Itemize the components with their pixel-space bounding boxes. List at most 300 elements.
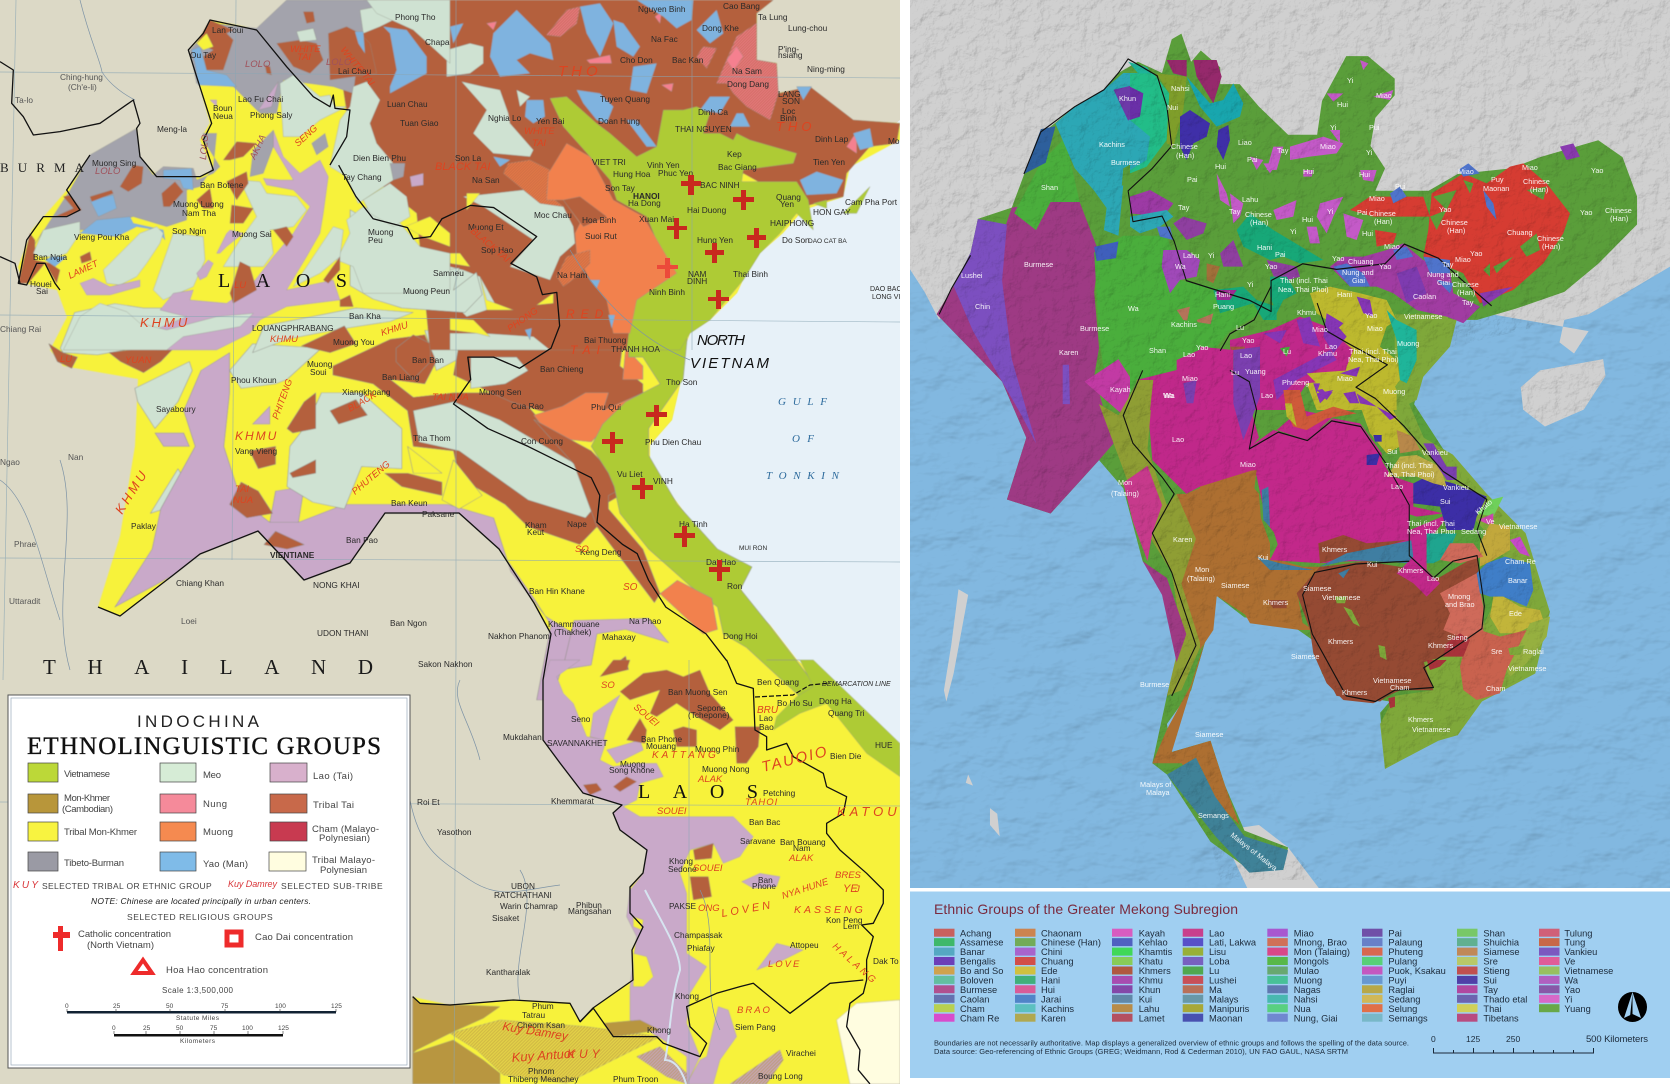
legend key line: tribal group and sub-tribe: KUY: [13, 880, 39, 891]
legend labels: Thai: [1483, 1004, 1501, 1014]
ethnic group labels: NUA: [233, 495, 253, 506]
ethnic group labels: [961, 76, 1632, 873]
ethnic group labels: KATOU: [837, 804, 901, 819]
ethnic group labels: Kayah: [1110, 385, 1131, 394]
legend labels: Cham: [960, 1004, 985, 1014]
place labels: Muong Sen: [479, 387, 522, 397]
ethnic group labels: Banar: [1508, 576, 1528, 585]
legend labels: Jarai: [1041, 994, 1061, 1004]
scale bars: Kilometers: [180, 1038, 216, 1045]
ethnic group labels: Yao: [1196, 343, 1208, 352]
ethnic group labels: Pui: [1395, 182, 1406, 191]
legend labels: Raglai: [1388, 985, 1415, 995]
ethnic group labels: KUY: [567, 1047, 604, 1061]
ethnic group labels: Stieng: [1447, 633, 1468, 642]
legend labels: Shuichia: [1483, 938, 1520, 948]
panel: Greater Mekong legend: [910, 892, 1670, 1078]
ethnic group labels: (Han): [1250, 218, 1268, 227]
place labels: Petching: [763, 788, 796, 798]
place labels: Lem: [843, 921, 859, 931]
place labels: Hung Yen: [697, 235, 733, 245]
place labels: Warin Chamrap: [500, 901, 558, 911]
place labels: HANOI: [633, 191, 660, 201]
legend labels: Nua: [1294, 1004, 1312, 1014]
source note: Boundaries are not necessarily authoritative. Map displays a generalized overview of ethnic groups and follows the spelling of the data source.: [934, 1038, 1409, 1047]
source note: [934, 1038, 1409, 1056]
place labels: Cheom Ksan: [517, 1020, 565, 1030]
legend labels: Tay: [1483, 985, 1498, 995]
ethnic regions wrapper: [18, 0, 900, 1084]
place labels: VINH: [653, 476, 673, 486]
place labels: Boung Long: [758, 1071, 803, 1081]
place labels: Nam Tha: [182, 208, 216, 218]
legend labels: Ede: [1041, 966, 1058, 976]
legend labels: Lushei: [1209, 976, 1236, 986]
ethnic group labels: Shan: [1041, 183, 1058, 192]
place labels: Ben Quang: [757, 677, 799, 687]
sea: [900, 0, 1670, 900]
place labels: Dak To: [873, 956, 899, 966]
ethnic group labels: WHITE: [524, 126, 555, 137]
ethnic group labels: Muong: [1397, 339, 1419, 348]
legend labels: Ma: [1209, 985, 1223, 995]
legend labels: Muong: [203, 827, 233, 838]
ethnic group labels: Wa: [1128, 304, 1140, 313]
place labels: Khemmarat: [551, 796, 595, 806]
legend labels: Pulang: [1388, 957, 1417, 967]
legend labels: Loba: [1209, 957, 1231, 967]
place labels: Saravane: [740, 836, 776, 846]
icon: Hoa Hao triangle: [134, 960, 152, 973]
ethnic group labels: Nea, Thai Phoi): [1348, 355, 1399, 364]
ethnic group labels: Burmese: [1080, 324, 1109, 333]
place labels: Kep: [727, 149, 742, 159]
ethnic group labels: PHONG: [505, 305, 540, 334]
place labels: Chiang Khan: [176, 578, 224, 588]
place labels: Boun: [213, 103, 233, 113]
legend labels: Palaung: [1388, 938, 1423, 948]
panel: Indochina ethnolinguistic map: [0, 0, 909, 1084]
place labels: LONG VI: [872, 294, 900, 301]
place labels: Phuc Yen: [658, 168, 693, 178]
place labels: Mong: [888, 136, 909, 146]
map title labels: countries and water bodies: LAOS: [218, 270, 347, 292]
place labels: Muong Et: [468, 222, 504, 232]
ethnic group labels: Wa: [1164, 391, 1176, 400]
ethnic group labels: Lu: [1231, 368, 1239, 377]
ethnic regions: northern Vietnam: [337, 0, 900, 350]
ethnic group labels: Vietnamese: [1508, 664, 1546, 673]
legend labels: Nahsi: [1294, 994, 1317, 1004]
place labels: HON GAY: [813, 207, 851, 217]
scale bars: Scale 1:3,500,000: [162, 986, 234, 995]
place labels: Lai Chau: [338, 66, 372, 76]
ethnic group labels: Siamese: [1303, 584, 1331, 593]
base: Chinese (Han) green: [937, 34, 1637, 870]
ethnic group labels: Yao: [1580, 208, 1592, 217]
legend labels: Kachins: [1041, 1004, 1074, 1014]
ethnic group labels: Miao: [1240, 460, 1256, 469]
legend labels: Nagas: [1294, 985, 1321, 995]
place labels: Lao: [759, 713, 773, 723]
ethnic group labels: Thai (incl. Thai: [1407, 519, 1455, 528]
place labels: Bo Ho Su: [777, 698, 813, 708]
ethnic group labels: SO: [623, 582, 638, 593]
ethnic regions: southern Laos: [413, 660, 900, 1084]
ethnic group labels: (Han): [1176, 151, 1194, 160]
ethnic group labels: Yi: [1327, 207, 1334, 216]
ethnic group labels: BRAO: [737, 1005, 772, 1016]
place labels: HAIPHONG: [770, 218, 814, 228]
ethnic regions: central Laos and Annam: [49, 286, 827, 700]
place labels: Yen Bai: [536, 116, 564, 126]
legend labels: Thado etal: [1483, 994, 1527, 1004]
ethnic group labels: Kui: [1258, 553, 1269, 562]
ethnic group labels: Karen: [1173, 535, 1192, 544]
legend labels: Vankieu: [1564, 947, 1597, 957]
ethnic group labels: Sedang: [1461, 527, 1486, 536]
ethnic group labels: Ede: [1509, 609, 1522, 618]
ethnic group labels: Sui: [1387, 447, 1398, 456]
legend title: [28, 716, 380, 754]
legend labels: Tribal Mon-Khmer: [64, 827, 137, 838]
place labels: Ban Muong Sen: [668, 687, 728, 697]
legend labels: (Cambodian): [62, 804, 113, 815]
ethnic group labels: Lao: [1172, 435, 1184, 444]
place labels: Tatrau: [522, 1010, 545, 1020]
legend labels: Hani: [1041, 976, 1060, 986]
place labels: Samneu: [433, 268, 464, 278]
ethnic group labels: YE: [843, 883, 858, 895]
place labels: Tuyen Quang: [600, 94, 650, 104]
legend labels: Ve: [1564, 957, 1575, 967]
ethnic group labels: Khato: [1474, 497, 1494, 517]
ethnic group labels: Giai: [1352, 276, 1365, 285]
ethnic group labels: Yao: [1365, 311, 1377, 320]
place labels: (Ch'e-li): [68, 82, 97, 92]
place labels: Dong Khe: [702, 23, 739, 33]
legend labels: Kayah: [1139, 928, 1165, 938]
place labels: Ban Bouang: [780, 837, 826, 847]
ethnic group labels: Nung and: [1427, 270, 1459, 279]
ethnic group labels: Wa: [1163, 391, 1175, 400]
ethnic group labels: KHMU: [380, 320, 410, 339]
ethnic group labels: KHMU: [140, 315, 190, 330]
place labels: Moc Chau: [534, 210, 572, 220]
legend labels: Cham Re: [960, 1013, 999, 1023]
ethnic group labels: WHITE: [290, 44, 321, 55]
ethnic group labels: HALANG: [830, 941, 880, 987]
place labels: Ron: [727, 581, 743, 591]
place labels: LANG: [778, 89, 801, 99]
legend labels: Burmese: [960, 985, 997, 995]
place labels: Seno: [571, 714, 591, 724]
ethnic group labels: Yi: [1347, 76, 1354, 85]
ethnic group labels: Hui: [1215, 162, 1226, 171]
ethnic group labels: Miao: [1458, 167, 1474, 176]
place labels: Muong Phin: [695, 744, 740, 754]
border: Burma and China: [0, 20, 350, 290]
ethnic group labels: PHUTENG: [350, 459, 393, 497]
ethnic group labels: Khun: [1119, 94, 1136, 103]
place labels: Song Khone: [609, 765, 655, 775]
ethnic group labels: Miao: [1369, 194, 1385, 203]
legend labels: Achang: [960, 928, 992, 938]
place labels: Bac Kan: [672, 55, 704, 65]
place labels: Vieng Pou Kha: [74, 232, 130, 242]
ethnic group labels: Hui: [1337, 100, 1348, 109]
legend labels: Banar: [960, 947, 985, 957]
ethnic group labels: Khmers: [1428, 641, 1453, 650]
place labels: Sakon Nakhon: [418, 659, 473, 669]
ethnic group labels: LOLO: [326, 57, 352, 68]
ethnic group labels: Pai: [1275, 250, 1286, 259]
legend labels: Khatu: [1139, 957, 1163, 967]
legend labels: [62, 769, 379, 876]
legend labels: Semangs: [1388, 1013, 1428, 1023]
legend labels: Selung: [1388, 1004, 1417, 1014]
place labels: Siem Pang: [735, 1022, 776, 1032]
ethnic group labels: Miao: [1182, 374, 1198, 383]
ethnic group labels: Khmers: [1342, 688, 1367, 697]
ethnic group labels: SOUEI: [657, 806, 687, 817]
legend labels: Tribal Malayo-: [312, 855, 375, 866]
legend swatches: [28, 763, 307, 871]
legend key line: tribal group and sub-tribe: [13, 879, 383, 922]
coloured ethnic regions: [937, 34, 1637, 873]
ethnic group labels: ONG: [698, 903, 720, 914]
place labels: Do Son: [782, 235, 810, 245]
place labels: Nguyen Binh: [638, 4, 686, 14]
ethnic group labels: Raglai: [1523, 647, 1544, 656]
ethnic group labels: Puang: [1213, 302, 1234, 311]
scale bars: 125: [278, 1025, 289, 1032]
ethnic group labels: Vietnamese: [1404, 312, 1442, 321]
map title labels: countries and water bodies: LAOS: [638, 781, 758, 803]
ethnic group labels: SENG: [293, 123, 320, 149]
ethnic group labels: Malaya: [1146, 788, 1170, 797]
ethnic group labels: Burmese: [1024, 260, 1053, 269]
place labels: Hai Duong: [687, 205, 727, 215]
map title labels: countries and water bodies: THAILAND: [43, 655, 373, 679]
place labels: Sop Ngin: [172, 226, 207, 236]
legend labels: Vietnamese: [64, 769, 110, 780]
ethnic group labels: Hui: [1303, 167, 1314, 176]
legend title: Ethnic Groups of the Greater Mekong Subregion: [934, 901, 1238, 917]
place labels: MUI RON: [739, 545, 767, 552]
border: Laos and Vietnam north: [339, 165, 727, 661]
legend labels: Tung: [1564, 938, 1585, 948]
legend labels: Karen: [1041, 1013, 1066, 1023]
ethnic group labels: THO: [558, 63, 602, 80]
ethnic group labels: Miao: [1337, 374, 1353, 383]
ethnic group labels: Khmers: [1263, 598, 1288, 607]
place labels: Tuan Giao: [400, 118, 439, 128]
scale bars: [65, 986, 342, 1045]
place labels: DEMARCATION LINE: [822, 681, 891, 688]
ethnic group labels: KHMU: [235, 429, 278, 443]
ethnic group labels: Yao: [1439, 205, 1451, 214]
ethnic group labels: Khmu: [1297, 308, 1316, 317]
legend labels: Lao (Tai): [313, 771, 353, 782]
place labels: Con Cuong: [521, 436, 563, 446]
ethnic group labels: Caolan: [1413, 292, 1436, 301]
place labels: Tien Yen: [813, 157, 845, 167]
place labels: Xiangkhoang: [342, 387, 391, 397]
place labels: Houei: [30, 279, 52, 289]
Catholic label: Catholic concentration: [78, 929, 171, 940]
ethnic group labels: SOUEI: [693, 863, 723, 874]
ethnic group labels: TAUOIO: [760, 743, 830, 776]
place labels: Son La: [455, 153, 482, 163]
legend labels: Lahu: [1139, 1004, 1159, 1014]
ethnic group labels: LOLO: [245, 59, 271, 70]
place labels: Nakhon Phanom: [488, 631, 550, 641]
place labels: Sai: [36, 286, 48, 296]
ethnic group labels: Chinese: [1369, 209, 1396, 218]
place labels: Lan Toui: [212, 25, 243, 35]
place labels: Sayaboury: [156, 404, 197, 414]
ethnic group labels: Yi: [1366, 148, 1373, 157]
ethnic group labels: Vietnamese: [1373, 676, 1411, 685]
ethnic group labels: Yao: [1332, 254, 1344, 263]
ethnic group labels: ALAK: [697, 774, 723, 785]
place labels: Quang: [776, 192, 801, 202]
place labels: Phu Qui: [591, 402, 621, 412]
place labels: UBON: [511, 881, 535, 891]
legend labels: Tribal Tai: [313, 800, 354, 811]
scale bars: 75: [221, 1003, 229, 1010]
place labels: Na Phao: [629, 616, 662, 626]
legend labels: Yi: [1564, 994, 1572, 1004]
ethnic group labels: Hui: [1302, 215, 1313, 224]
place labels: Phiafay: [687, 943, 716, 953]
ethnic group labels: TAI: [570, 343, 606, 357]
legend labels: Mon (Talaing): [1294, 947, 1350, 957]
ethnic group labels: Chinese: [1452, 280, 1479, 289]
legend labels: Bo and So: [960, 966, 1003, 976]
ethnic group labels: Maonan: [1483, 184, 1509, 193]
scale bar: 500 Kilometers: [1586, 1034, 1648, 1045]
ethnic group labels: WHITE TAI: [338, 45, 377, 88]
place labels: Dong Hoi: [723, 631, 758, 641]
place labels: Bien Die: [830, 751, 862, 761]
legend labels: Khamtis: [1139, 947, 1173, 957]
ethnic group labels: and Brao: [1445, 600, 1475, 609]
place labels: Ban Ngon: [390, 618, 427, 628]
ethnic group labels: Hani: [1257, 243, 1272, 252]
legend labels: Polynesian: [320, 865, 367, 876]
legend labels: Polynesian): [319, 833, 370, 844]
ethnic group labels: Chinese: [1605, 206, 1632, 215]
place labels: VIENTIANE: [270, 550, 315, 560]
rivers: [0, 0, 720, 1030]
place labels: Dinh Lap: [815, 134, 849, 144]
map title labels: countries and water bodies: TONKIN: [766, 470, 840, 482]
ethnic group labels: Vietnamese: [1322, 593, 1360, 602]
place labels: Cho Don: [620, 55, 653, 65]
place labels: Phu Dien Chau: [645, 437, 702, 447]
ethnic group labels: BLACK TAI: [435, 161, 490, 173]
ethnic group labels: Chinese: [1441, 218, 1468, 227]
ethnic group labels: Siamese: [1221, 581, 1249, 590]
place labels: Na San: [472, 175, 500, 185]
ethnic group labels: Lao: [1261, 391, 1273, 400]
ethnic group labels: LOLO: [198, 133, 211, 160]
place labels: Ban Hin Khane: [529, 586, 585, 596]
ethnic group labels: Semangs: [1198, 811, 1229, 820]
place labels: Hung Hoa: [613, 169, 651, 179]
legend labels: Manipuris: [1209, 1004, 1250, 1014]
place labels: DAO BACH: [870, 286, 907, 293]
place labels: Muong: [620, 759, 646, 769]
place labels: Phrae: [14, 539, 37, 549]
ethnic group labels: (Han): [1542, 242, 1560, 251]
ethnic group labels: Yao: [1379, 262, 1391, 271]
legend labels: Khun: [1139, 985, 1160, 995]
legend labels: Meo: [203, 770, 221, 781]
ethnic group labels: BLACK: [346, 389, 379, 415]
ethnic group labels: Miao: [1367, 324, 1383, 333]
ethnic group labels: Vietnamese: [1412, 725, 1450, 734]
ethnic group labels: Yi: [1290, 227, 1297, 236]
place labels: Cua Rao: [511, 401, 544, 411]
legend labels: Maonan: [1209, 1013, 1243, 1023]
scale bars: 125: [331, 1003, 342, 1010]
ethnic group labels: Lahu: [1183, 251, 1199, 260]
place labels: Paklay: [131, 521, 157, 531]
legend labels: Lamet: [1139, 1013, 1165, 1023]
ethnic group labels: Burmese: [1111, 158, 1140, 167]
ethnic group labels: Hui: [1359, 170, 1370, 179]
ethnic group labels: LU: [234, 280, 246, 291]
place labels: Tho Son: [666, 377, 698, 387]
scale bars: 25: [113, 1003, 121, 1010]
place labels: THAI NGUYEN: [675, 124, 732, 134]
place labels: Bac Giang: [718, 162, 757, 172]
border: Laos with Thailand: [98, 513, 647, 1022]
place labels: Vu Liet: [617, 469, 643, 479]
Catholic label: [78, 929, 171, 951]
ethnic group labels: Pai: [1187, 175, 1198, 184]
ethnic group labels: Hui: [1362, 229, 1373, 238]
legend labels: Puok, Ksakau: [1388, 966, 1446, 976]
place labels: Chiang Rai: [0, 324, 41, 334]
ethnic group labels: Nui: [1167, 103, 1178, 112]
ethnic group labels: Mon: [1195, 565, 1209, 574]
ethnic group labels: Wa: [1175, 262, 1187, 271]
ethnic group labels: (Talaing): [1111, 489, 1139, 498]
ethnic group labels: Miao: [1522, 163, 1538, 172]
ethnic group labels: Chinese: [1537, 234, 1564, 243]
scale bar: 125: [1466, 1034, 1480, 1044]
ethnic group labels: Yi: [1208, 251, 1215, 260]
ethnic group labels: Khmers: [1322, 545, 1347, 554]
place labels: Lao Fu Chai: [238, 94, 283, 104]
ethnic group labels: Vankieu: [1422, 448, 1448, 457]
ethnic group labels: TAI NUA: [432, 392, 469, 403]
place labels: Ban Botene: [200, 180, 244, 190]
ethnic group labels: Pai: [1357, 208, 1368, 217]
place labels: Mukdahan: [503, 732, 542, 742]
ethnic group labels: LAMET: [67, 258, 101, 282]
ethnic group labels: Chinese: [1245, 210, 1272, 219]
ethnic group labels: Thai (incl. Thai: [1385, 461, 1433, 470]
legend labels: Tulung: [1564, 928, 1592, 938]
ethnic group labels: Puy: [1491, 175, 1504, 184]
place labels: Ban Pao: [346, 535, 378, 545]
legend title: ETHNOLINGUISTIC GROUPS: [27, 733, 381, 760]
